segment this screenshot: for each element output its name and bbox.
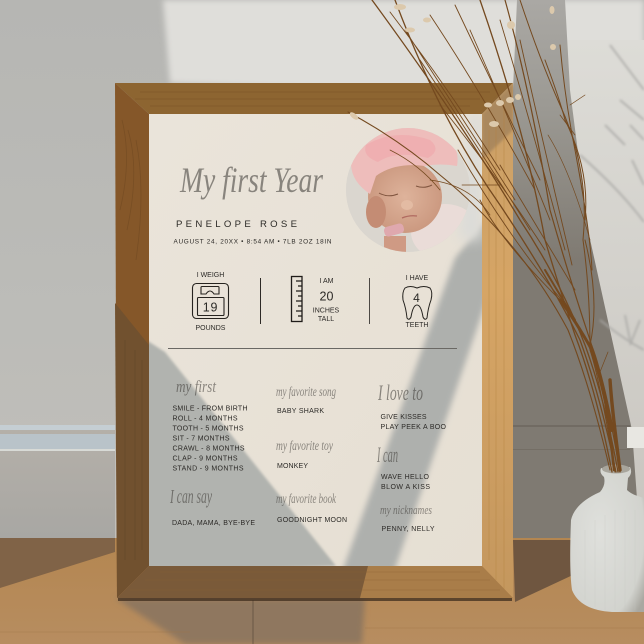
stat: weight: I WEIGH [197,272,224,279]
wood floor [0,538,644,644]
circular baby photo [346,128,470,252]
column 1: my first: SIT - 7 MONTHS [172,436,230,442]
column 1: my first: my first [176,377,217,396]
flower bonnet [351,128,458,194]
column 1: I can say [169,486,255,527]
column 3: my nicknames: PENNY, NELLY [382,526,435,533]
column 2: favorite book: GOODNIGHT MOON [277,517,347,524]
birth details: AUGUST 24, 20XX • 8:54 AM • 7LB 2OZ 18IN [174,238,332,246]
column 3: I can: BLOW A KISS [381,484,430,491]
column 1: my first: STAND - 9 MONTHS [172,466,244,472]
column 3: my nicknames [380,502,435,533]
column 1: my first: SMILE - FROM BIRTH [172,406,248,412]
wooden frame [115,83,513,598]
column 2: favorite book [276,492,347,524]
name: PENELOPE ROSE [176,219,297,230]
column 3: I can: I can [377,442,398,467]
stat: height [292,276,340,323]
title: My first Year [179,160,324,200]
blanket [411,204,466,250]
column 3: I can: WAVE HELLO [381,474,430,481]
top rail [115,83,513,114]
column 2: favorite toy [276,439,334,470]
column 3: I love to: I love to [377,380,423,405]
column 1: I can say: I can say [169,486,212,508]
stat: teeth: I HAVE [406,275,429,282]
divider [260,278,261,324]
paper [140,114,490,572]
icon: tooth [403,286,432,319]
column 2: favorite song: my favorite song [276,385,336,400]
column 3: I love to: GIVE KISSES [380,414,427,421]
icon: ruler [292,276,302,322]
column 1: my first [172,377,248,472]
column 3: I love to: PLAY PEEK A BOO [380,424,447,431]
face [368,161,442,233]
vase [570,464,644,612]
stat: weight [192,272,228,332]
dried branches [348,0,620,472]
column 2: favorite song: BABY SHARK [277,408,324,415]
stat: teeth: 4 [413,291,420,305]
column 2: favorite song [276,385,336,415]
column 3: I love to [377,380,447,431]
column 2: favorite toy: my favorite toy [276,439,334,454]
column 3: I can [377,442,430,491]
column 1: my first: CLAP - 9 MONTHS [172,456,238,462]
stat: teeth [403,275,432,329]
stat: height: I AM [319,278,334,285]
baseboard [0,425,644,538]
wall leaf shadows [580,45,644,350]
column 1: my first: TOOTH - 5 MONTHS [172,426,244,432]
stat: height: 20 [320,290,333,304]
icon: scale [192,284,228,318]
column 2: favorite toy: MONKEY [277,463,308,470]
column 3: my nicknames: my nicknames [380,502,432,517]
closed eyes, nose, mouth [379,185,432,196]
column 1: my first: ROLL - 4 MONTHS [172,416,238,422]
dried blossoms [349,4,556,127]
column 1: my first: CRAWL - 8 MONTHS [172,446,245,452]
stat: weight: 19 [203,300,218,314]
divider [369,278,370,324]
hand and wristband [384,236,406,252]
stat: height: INCHES [313,308,340,314]
stat: height: TALL [318,316,334,323]
column 1: I can say: DADA, MAMA, BYE-BYE [172,520,255,527]
stat: teeth: TEETH [406,322,428,329]
section divider [168,348,457,349]
column 2: favorite book: my favorite book [276,492,336,507]
left rail [115,83,149,598]
right rail [482,83,513,598]
bottom rail [117,566,513,598]
stat: weight: POUNDS [196,325,226,332]
